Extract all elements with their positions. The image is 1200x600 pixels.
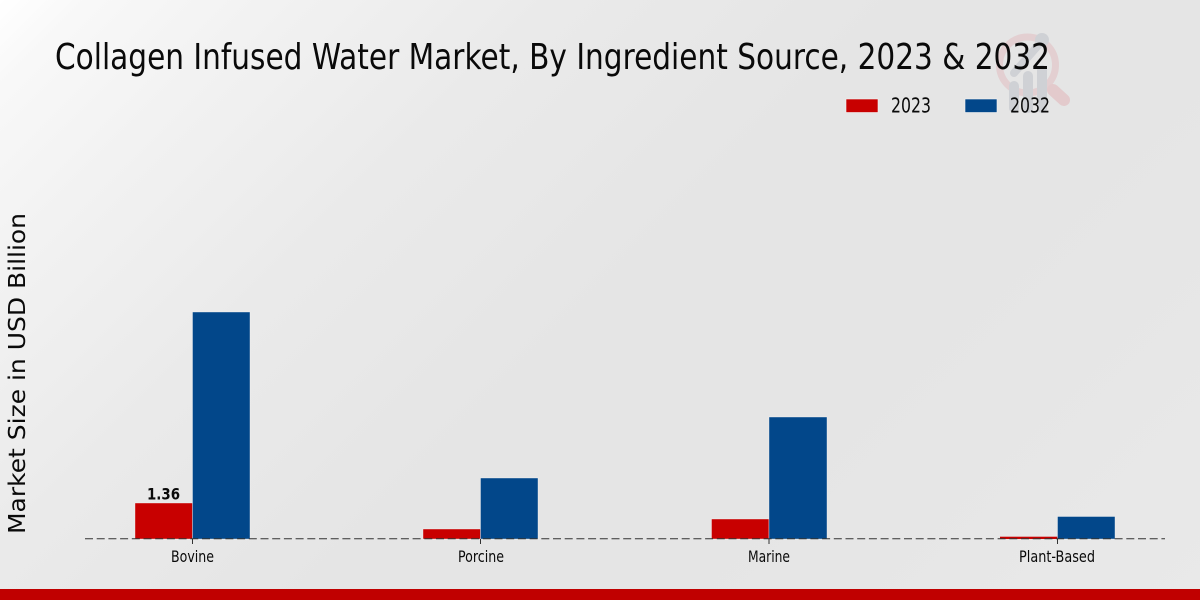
legend — [846, 94, 1050, 118]
group: Plant-Based — [1000, 516, 1115, 539]
x axis labels: Marine — [748, 547, 790, 566]
y axis title: Market Size in USD Billion — [5, 213, 31, 534]
watermark logo icon — [1000, 33, 1064, 108]
x axis baseline — [85, 538, 1165, 540]
x axis labels — [171, 547, 1095, 566]
group: Bovine — [135, 312, 250, 539]
group: Marine — [712, 417, 827, 539]
bar chart — [85, 312, 1165, 566]
bottom red band — [0, 589, 1200, 600]
legend label 2032: 2032 — [1010, 94, 1050, 118]
value label: 1.36 — [147, 484, 180, 503]
legend label 2023: 2023 — [891, 94, 931, 118]
legend swatch 2032 — [965, 99, 997, 112]
x axis labels: Bovine — [171, 547, 214, 566]
x axis labels: Porcine — [458, 547, 504, 566]
group: Porcine — [423, 478, 538, 539]
x axis labels: Plant-Based — [1019, 547, 1095, 566]
legend swatch 2023 — [846, 99, 878, 112]
